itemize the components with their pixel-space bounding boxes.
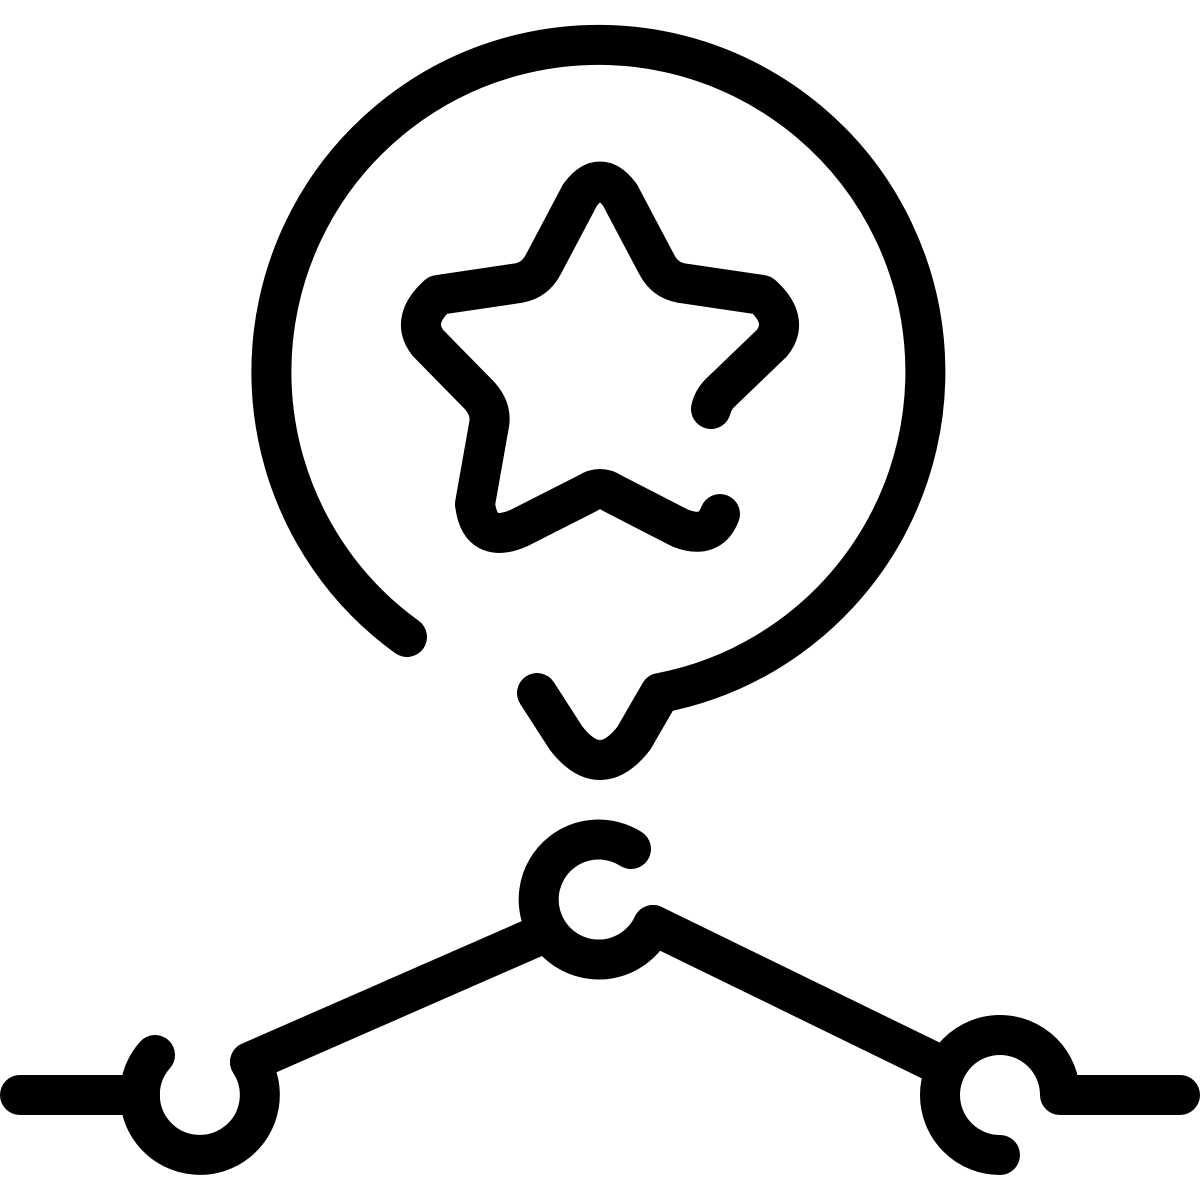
right end hook and bar bbox=[940, 1035, 1180, 1155]
star bbox=[421, 182, 779, 533]
hanger arms bbox=[250, 925, 940, 1065]
hanger hook bbox=[539, 840, 653, 960]
speech bubble bbox=[271, 45, 925, 760]
left end hook and bar bbox=[20, 1055, 260, 1155]
